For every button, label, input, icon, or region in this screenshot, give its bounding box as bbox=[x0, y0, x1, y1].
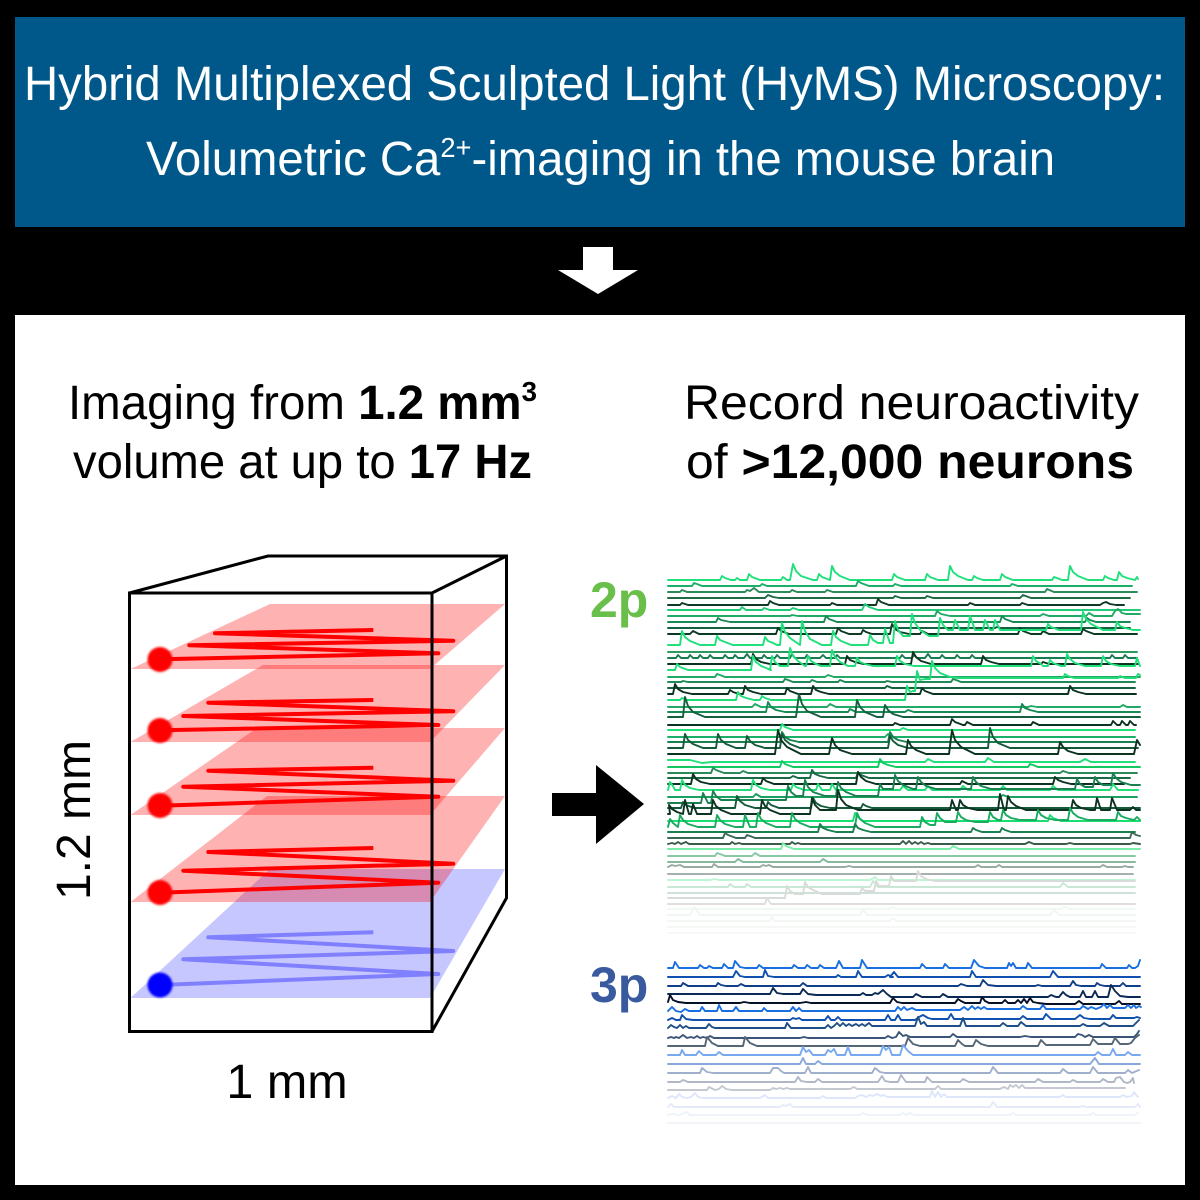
arrow: black right arrow bbox=[552, 765, 644, 844]
label: width 1 mm: 1 mm bbox=[226, 1055, 348, 1109]
plane: 3p blue bbox=[130, 869, 505, 998]
label: depth 1.2 mm: 1.2 mm bbox=[48, 740, 101, 900]
panel: white content panel bbox=[15, 315, 1185, 1185]
label: 2p: 2p bbox=[590, 572, 648, 628]
heading: imaging volume and rate bbox=[68, 376, 537, 489]
title line 2: Volumetric Ca bbox=[146, 132, 448, 186]
box front face bbox=[130, 593, 432, 1032]
scan path: red 2 bbox=[160, 700, 453, 730]
plane: 2p red 3 bbox=[130, 728, 505, 815]
title line 2: 2+ bbox=[440, 132, 471, 163]
heading: imaging volume and rate: 3 bbox=[522, 376, 537, 407]
heading: recorded neurons: of >12,000 neurons bbox=[686, 436, 1134, 489]
scan path: red 4 bbox=[160, 848, 453, 893]
heading: recorded neurons bbox=[684, 377, 1139, 489]
scan path: blue bbox=[160, 932, 453, 985]
plane: 2p red 2 bbox=[130, 665, 505, 742]
chart: 3p neural activity traces bbox=[668, 960, 1141, 1123]
scan path: red 1 bbox=[160, 630, 453, 659]
heading: imaging volume and rate: volume at up to 17 Hz bbox=[73, 436, 532, 489]
scan path: red 3 bbox=[160, 768, 453, 806]
heading: recorded neurons: Record neuroactivity bbox=[684, 377, 1139, 430]
beam spots bbox=[148, 647, 172, 998]
title banner bbox=[15, 17, 1185, 227]
diagram: imaging volume box bbox=[130, 556, 506, 1032]
chart: 2p neural activity traces bbox=[668, 564, 1140, 933]
title line 1: Hybrid Multiplexed Sculpted Light (HyMS) Microscopy: bbox=[24, 57, 1165, 111]
arrow: white down arrow bbox=[558, 247, 638, 294]
heading: imaging volume and rate: Imaging from 1.2 mm bbox=[68, 377, 523, 430]
title line 2: -imaging in the mouse brain bbox=[471, 132, 1055, 186]
box back edges bbox=[130, 556, 506, 1032]
label: 3p: 3p bbox=[590, 957, 648, 1013]
plane: 2p red 1 bbox=[130, 604, 505, 669]
plane: 2p red 4 bbox=[130, 796, 505, 902]
